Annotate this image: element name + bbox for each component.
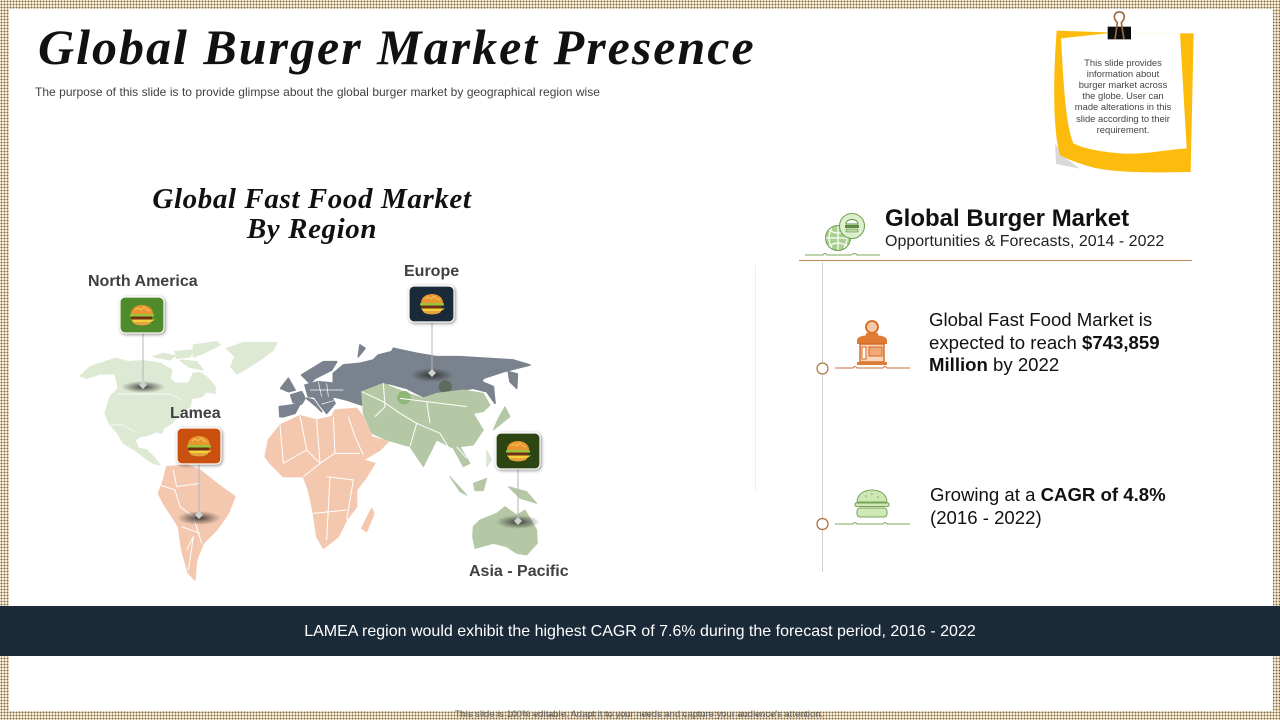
sticky note text: made alterations in this bbox=[1075, 101, 1171, 112]
africa and middle east bbox=[265, 408, 388, 548]
fact: cagr: (2016 - 2022) bbox=[930, 506, 1042, 528]
north america bbox=[81, 342, 277, 465]
fact: cagr bbox=[930, 484, 1166, 528]
panel subheading: Opportunities & Forecasts, 2014 - 2022 bbox=[885, 233, 1164, 250]
icon: food kiosk bbox=[835, 321, 910, 368]
europe and russia bbox=[279, 345, 530, 417]
banner bbox=[0, 606, 1280, 656]
marker north america bbox=[120, 297, 164, 333]
marker lamea bbox=[177, 428, 221, 464]
right panel lines and icons bbox=[755, 213, 1192, 572]
marker asia pacific bbox=[496, 433, 540, 469]
banner: LAMEA region would exhibit the highest CAGR of 7.6% during the forecast period, 2016 - 2022 bbox=[304, 623, 976, 640]
sticky note text bbox=[1075, 56, 1171, 135]
label europe: Europe bbox=[404, 263, 459, 280]
marker europe bbox=[409, 286, 454, 322]
label asia pacific: Asia - Pacific bbox=[469, 563, 569, 580]
fact: market size: Global Fast Food Market is bbox=[929, 309, 1152, 330]
fact: market size: Million by 2022 bbox=[929, 354, 1059, 375]
fact: cagr: Growing at a CAGR of 4.8% bbox=[930, 484, 1166, 505]
title: Global Burger Market Presence bbox=[38, 19, 756, 75]
label north america: North America bbox=[88, 273, 198, 290]
label lamea: Lamea bbox=[170, 405, 221, 422]
fact: market size: expected to reach $743,859 bbox=[929, 332, 1160, 352]
world map bbox=[80, 284, 544, 581]
map heading: Global Fast Food Market bbox=[152, 183, 472, 215]
sticky note text: slide according to their bbox=[1076, 113, 1170, 124]
marker shadows bbox=[121, 368, 540, 529]
map heading: By Region bbox=[247, 213, 377, 245]
sticky note text: requirement. bbox=[1097, 124, 1149, 135]
marker pins bbox=[143, 322, 518, 520]
panel heading: Global Burger Market bbox=[885, 205, 1129, 232]
icon: globe and burger bbox=[805, 214, 880, 255]
sticky note text: information about bbox=[1087, 68, 1159, 79]
subtitle: The purpose of this slide is to provide glimpse about the global burger market by geographical region wise bbox=[35, 85, 600, 99]
map heading bbox=[152, 183, 472, 245]
sticky note text: This slide provides bbox=[1084, 56, 1162, 68]
sticky note text: the globe. User can bbox=[1082, 90, 1164, 101]
footer note: This slide is 100% editable. Adapt it to your needs and capture your audience's attention. bbox=[455, 708, 823, 719]
icon: burger bbox=[835, 490, 910, 524]
sticky note bbox=[1054, 11, 1194, 172]
fact: market size bbox=[929, 309, 1160, 375]
asia bbox=[362, 383, 537, 555]
sticky note text: burger market across bbox=[1079, 79, 1167, 90]
south america bbox=[158, 465, 235, 580]
